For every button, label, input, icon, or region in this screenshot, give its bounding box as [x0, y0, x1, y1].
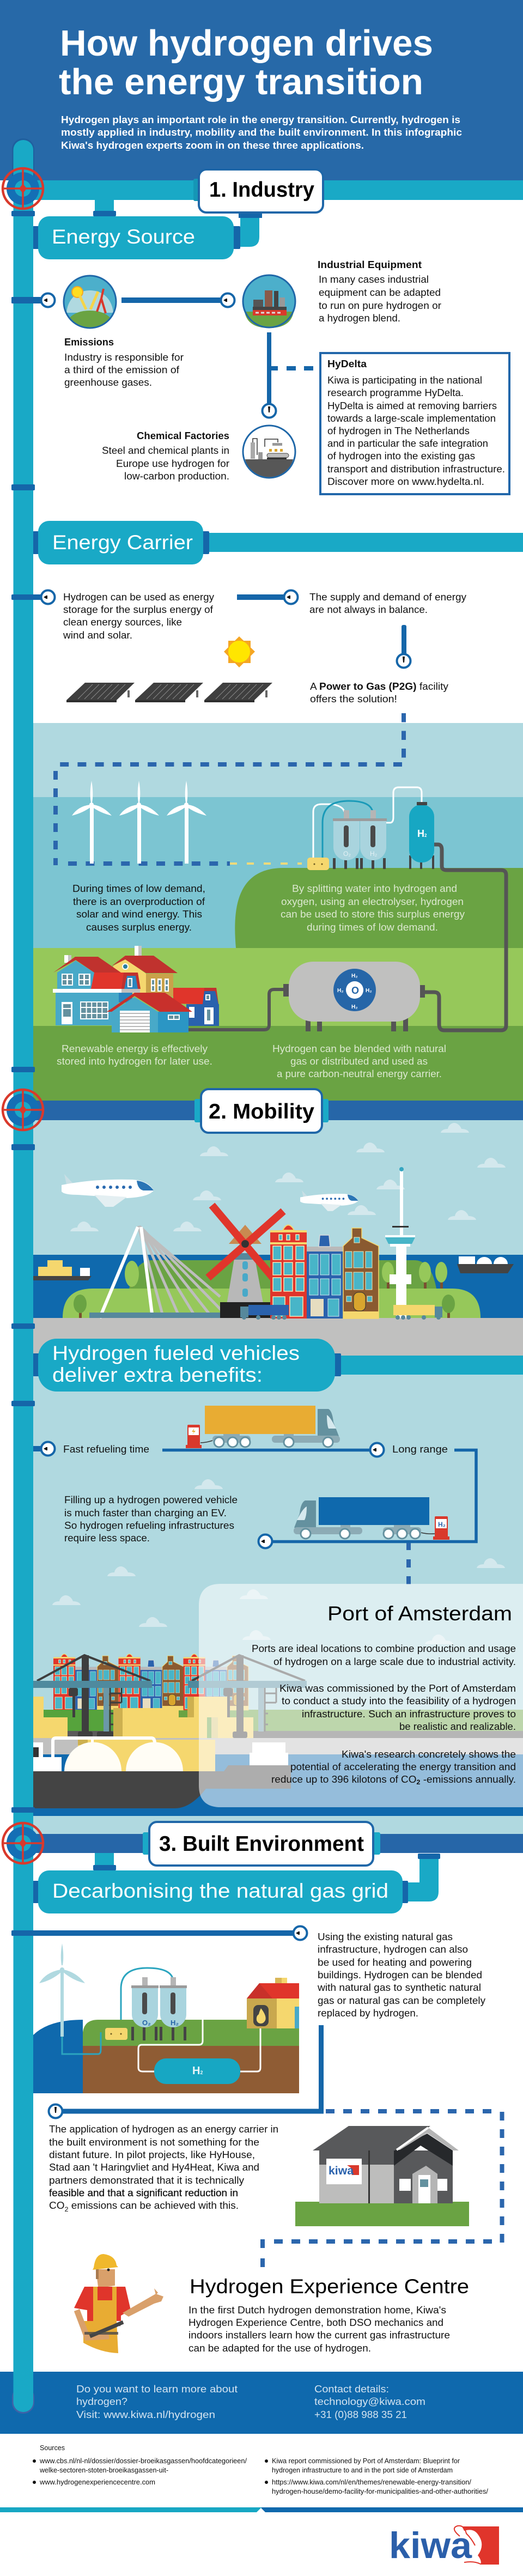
text: contact details: +31 (0)88 988 35 21: [314, 2409, 407, 2420]
callout: HyDelta: transport and distribution infrastructure.: [327, 464, 505, 475]
text: industrial equipment: [318, 259, 441, 324]
text: industrial equipment: Industrial Equipment: [318, 259, 422, 270]
connectors: energy carrier: [13, 594, 406, 655]
box: 3. Built Environment: 3. Built Environment: [159, 1832, 364, 1856]
text: existing gas infrastructure: Using the existing natural gas: [318, 1931, 453, 1942]
text: power to gas: offers the solution!: [310, 694, 397, 704]
callout: HyDelta: HyDelta is aimed at removing barriers: [327, 400, 497, 411]
text: learn more: Do you want to learn more about: [76, 2384, 238, 2395]
text: existing gas infrastructure: infrastructure, hydrogen can also: [318, 1944, 468, 1955]
text: chemical factories: low-carbon production.: [124, 471, 229, 482]
text: splitting water: By splitting water into hydrogen and: [292, 883, 457, 894]
sources: www.cbs.nl/nl-nl/dossier/dossier-broeikasgassen/hoofdcategorieen/: [39, 2457, 247, 2465]
text: filling up: Filling up a hydrogen powered vehicle: [64, 1494, 238, 1505]
text: filling up: So hydrogen refueling infrastructures: [64, 1520, 234, 1531]
sources: Sources: [40, 2444, 65, 2452]
ships in harbour: [33, 1256, 514, 1280]
callout: HyDelta: Kiwa is participating in the national: [327, 375, 482, 386]
icon: hydrogen house: [295, 2126, 469, 2226]
illustration: built environment system: O₂: [142, 2019, 151, 2027]
text: energy storage: wind and solar.: [63, 630, 132, 641]
hydrogen pump: H₂: [438, 1521, 446, 1528]
planes: [62, 1174, 358, 1211]
heading: decarbonising: Decarbonising the natural gas grid: [52, 1880, 388, 1902]
text: experience centre: In the first Dutch hydrogen demonstration home, Kiwa's: [188, 2305, 446, 2316]
heading: decarbonising: [33, 1870, 408, 1913]
heading: hydrogen fueled vehicles: [33, 1339, 523, 1392]
callout: HyDelta: and in particular the safe integration: [327, 438, 488, 449]
text: experience centre: [188, 2305, 450, 2354]
text: low demand: [72, 883, 205, 933]
callout: HyDelta: towards a large-scale implementation: [327, 413, 496, 424]
icon: hydrogen tank: H2: [417, 828, 427, 839]
markers: [41, 293, 276, 417]
text: port description: reduce up to 396 kilotons of CO: [271, 1774, 409, 1785]
text: port description: infrastructure. Such an infrastructure proves to: [302, 1709, 516, 1720]
connector stub: [33, 1446, 42, 1451]
icon: hydrogen house: kiwa: [329, 2165, 354, 2177]
text: existing gas infrastructure: with natural gas to synthetic natural: [317, 1982, 481, 1993]
text: existing gas infrastructure: buildings. Hydrogen can be blended: [318, 1970, 482, 1980]
text: pilot projects: emissions can be achieved with this.: [69, 2200, 239, 2211]
callout: HyDelta: HyDelta: [327, 359, 367, 369]
text: renewable stored: stored into hydrogen for later use.: [57, 1056, 212, 1067]
text: port description: Kiwa was commissioned by the Port of Amsterdam: [279, 1683, 516, 1694]
sources: www.hydrogenexperiencecentre.com: [39, 2478, 155, 2486]
box: 3. Built Environment: [143, 1822, 380, 1866]
text: port description: Ports are ideal locations to combine production and usage: [252, 1643, 516, 1654]
main vertical pipe: [12, 138, 34, 2414]
text: existing gas infrastructure: replaced by hydrogen.: [318, 2008, 418, 2019]
text: port description: 2: [416, 1778, 421, 1786]
charging pump: [186, 1425, 212, 1448]
text: renewable stored: [57, 1043, 212, 1067]
text: filling up: [64, 1494, 238, 1544]
text: port description: of hydrogen on a large scale due to industrial activity.: [273, 1656, 516, 1667]
text: pilot projects: partners demonstrated that it is technically: [49, 2175, 244, 2186]
text: low demand: solar and wind energy. This: [76, 909, 202, 920]
dashed arrow: to experience centre: [263, 2111, 502, 2267]
callout: HyDelta: Discover more on www.hydelta.nl.: [327, 476, 484, 487]
valves: [3, 168, 43, 1863]
title: How hydrogen drives: [60, 23, 433, 64]
marker: [49, 2104, 62, 2118]
heading: 1. Industry: [193, 169, 324, 212]
text: blended: gas or distributed and used as: [290, 1056, 428, 1067]
text: emissions: [64, 337, 184, 388]
text: filling up: require less space.: [64, 1533, 150, 1544]
heading: Port of Amsterdam: Port of Amsterdam: [327, 1602, 512, 1625]
trucks in city: [240, 1305, 442, 1320]
text: chemical factories: [102, 430, 229, 482]
title: [59, 23, 433, 102]
connector line: [11, 1930, 294, 1936]
icon: sun: [224, 636, 255, 667]
icon: storage tank: H₂: [351, 1004, 358, 1010]
text: supply and demand: [309, 592, 466, 615]
text: low demand: During times of low demand,: [72, 883, 205, 894]
section background: mobility: [33, 1120, 523, 1834]
text: energy storage: clean energy sources, like: [63, 617, 182, 628]
footer band: [0, 2372, 523, 2434]
pipe line to pilot text: [63, 2025, 321, 2111]
icon: electrolyser: [307, 787, 422, 870]
text: blended: [272, 1043, 446, 1079]
benefits connector line: [162, 1450, 476, 1542]
port scene: [33, 1654, 523, 1808]
text: industrial equipment: to run on pure hydrogen or: [319, 300, 441, 311]
blue truck: [294, 1497, 429, 1539]
text: emissions: Emissions: [64, 337, 114, 348]
text: existing gas infrastructure: gas or natural gas can be completely: [318, 1995, 485, 2006]
hydrogen pump: [421, 1516, 449, 1540]
title: the energy transition: [59, 62, 423, 102]
icon: worker: [74, 2254, 163, 2353]
heading: hydrogen experience centre: Hydrogen Experience Centre: [190, 2275, 469, 2298]
text: port description: to conduct a study into the feasibility of a hydrogen: [282, 1696, 516, 1706]
heading: energy source: [33, 216, 240, 259]
text: learn more: [76, 2384, 238, 2420]
text: power to gas: A Power to Gas (P2G) facility: [310, 681, 448, 692]
text: chemical factories: Europe use hydrogen for: [116, 458, 229, 469]
text: port description: [252, 1643, 516, 1786]
pipe: house to storage: [188, 989, 283, 1030]
icon: emissions circle: [64, 276, 116, 328]
yellow truck: [205, 1406, 340, 1447]
text: low demand: causes surplus energy.: [86, 922, 192, 933]
text: port description: potential of accelerating the energy transition and: [290, 1761, 516, 1772]
text: pilot projects: the built environment is not something for the: [49, 2137, 259, 2148]
illustration: built environment system: H2: [192, 2065, 203, 2077]
mobility landscape: [63, 1260, 481, 1318]
built environment pipe: [33, 1834, 523, 1853]
callout: HyDelta: of hydrogen into the existing gas: [327, 451, 475, 461]
energy source connector pipes: [93, 200, 262, 247]
text: power to gas: [310, 681, 448, 704]
text: blended: a pure carbon-neutral energy carrier.: [277, 1068, 442, 1079]
text: energy storage: Hydrogen can be used as energy: [63, 592, 214, 603]
heading: energy carrier: [33, 521, 523, 564]
pipe flanges: [11, 211, 42, 1936]
text: industrial equipment: In many cases industrial: [319, 274, 429, 285]
sources: [33, 2444, 488, 2495]
intro text: mostly applied in industry, mobility and the built environment. In this infographic: [61, 127, 462, 138]
text: contact details: technology@kiwa.com: [314, 2396, 425, 2407]
text: pilot projects: distant future. In pilot projects, like HyHouse,: [49, 2149, 255, 2160]
text: chemical factories: Steel and chemical plants in: [102, 445, 229, 456]
marker: [293, 1927, 307, 1940]
text: splitting water: oxygen, using an electrolyser, hydrogen: [281, 896, 464, 907]
text: filling up: is much faster than charging an EV.: [64, 1508, 227, 1518]
icon: houses: [53, 946, 219, 1032]
text: energy storage: storage for the surplus energy of: [63, 604, 214, 615]
box: 2. Mobility: [194, 1089, 329, 1133]
text: existing gas infrastructure: [317, 1931, 485, 2019]
sources: hydrogen infrastructure to and in the port side of Amsterdam: [272, 2466, 453, 2474]
text: blended: Hydrogen can be blended with natural: [272, 1043, 446, 1054]
header band: [0, 0, 523, 180]
sources: Kiwa report commissioned by Port of Amsterdam: Blueprint for: [272, 2457, 460, 2465]
text: fast refueling time: Fast refueling time: [63, 1444, 149, 1455]
text: emissions: greenhouse gases.: [64, 377, 152, 388]
text: experience centre: can be adapted for the use of hydrogen.: [188, 2343, 371, 2354]
text: pilot projects: Stad aan 't Haringvliet and Hy4Heat, Kiwa and: [49, 2162, 259, 2173]
mobility pipe: [33, 1101, 523, 1120]
heading: hydrogen fueled vehicles: Hydrogen fueled vehicles: [52, 1342, 300, 1364]
icon: hydrogen tank: [409, 802, 434, 869]
heading: 1. Industry: 1. Industry: [209, 178, 314, 202]
icon: chemical factories circle: [243, 426, 295, 478]
text: pilot projects: CO: [49, 2200, 64, 2211]
text: splitting water: can be used to store this surplus energy: [281, 909, 465, 920]
callout: HyDelta: research programme HyDelta.: [327, 387, 464, 398]
panel: Port of Amsterdam overlay: [199, 1584, 523, 1807]
port clouds: [52, 1479, 505, 1644]
callout: HyDelta: of hydrogen in The Netherlands: [327, 426, 470, 436]
text: existing gas infrastructure: be used for heating and powering: [318, 1957, 472, 1968]
text: port description: Kiwa's research concretely shows the: [342, 1749, 516, 1760]
text: contact details: [314, 2384, 425, 2420]
built environment connector pipes: [93, 1853, 440, 1901]
mobility clouds: [70, 1123, 506, 1231]
callout: HyDelta: [320, 353, 509, 494]
sources: welke-sectoren-stoten-broeikasgassen-uit-: [39, 2466, 168, 2474]
text: emissions: Industry is responsible for: [64, 352, 184, 363]
icon: storage tank: H₂: [366, 988, 372, 994]
icon: storage tank: H₂: [337, 988, 344, 994]
icon: wind turbines: [72, 781, 206, 864]
icon: industrial equipment circle: [243, 275, 295, 328]
bottom colour bar: [0, 2507, 523, 2512]
text: pilot projects: 2: [64, 2206, 69, 2213]
illustration: built environment system: H₂: [171, 2019, 179, 2027]
text: industrial equipment: a hydrogen blend.: [319, 313, 400, 324]
icon: storage tank: H₂: [351, 973, 358, 979]
text: emissions: a third of the emission of: [64, 364, 180, 375]
sources: https://www.kiwa.com/nl/en/themes/renewable-energy-transition/: [272, 2478, 471, 2486]
section background: energy carrier landscape: [33, 723, 523, 1101]
text: learn more: Visit: www.kiwa.nl/hydrogen: [76, 2409, 215, 2420]
windmill: [208, 1205, 283, 1318]
icon: electrolyser: H₂: [370, 850, 378, 858]
icon: storage tank: [283, 962, 425, 1031]
pipe: gas network: [425, 845, 506, 1030]
text: energy storage: [63, 592, 214, 641]
text: pilot projects: The application of hydrogen as an energy carrier in: [49, 2124, 278, 2135]
text: supply and demand: are not always in balance.: [309, 604, 428, 615]
icon: storage tank: O: [351, 985, 359, 996]
heading: energy source: Energy Source: [52, 226, 195, 248]
text: long range: Long range: [392, 1444, 448, 1455]
text: contact details: Contact details:: [314, 2384, 389, 2395]
text: splitting water: [281, 883, 465, 933]
text: renewable stored: Renewable energy is effectively: [62, 1043, 208, 1054]
teal industry pipe: [33, 180, 523, 200]
kiwa logo: kiwa: [389, 2525, 472, 2566]
dashed arrow: power to gas route: [56, 713, 404, 865]
text: port description: -emissions annually.: [420, 1774, 516, 1785]
trees: [74, 1261, 455, 1318]
intro text: [61, 114, 462, 151]
text: pilot projects: [49, 2124, 278, 2213]
text: splitting water: during times of low demand.: [307, 922, 438, 933]
text: low demand: there is an overproduction of: [73, 896, 205, 907]
Erasmus bridge: [89, 1226, 229, 1318]
intro text: Kiwa's hydrogen experts zoom in on these three applications.: [61, 140, 364, 151]
text: learn more: hydrogen?: [76, 2396, 127, 2407]
text: experience centre: Hydrogen Experience Centre, both DSO mechanics and: [188, 2317, 443, 2328]
dashed arrow to port: [406, 1543, 411, 1584]
markers: [41, 591, 411, 668]
sources: hydrogen-house/demo-facility-for-municipalities-and-other-authorities/: [272, 2487, 488, 2495]
text: chemical factories: Chemical Factories: [137, 430, 229, 441]
illustration: built environment system: [33, 1943, 299, 2093]
markers: [41, 1442, 384, 1548]
text: pilot projects: feasible and that a significant reduction in: [49, 2188, 238, 2198]
box: 2. Mobility: 2. Mobility: [209, 1100, 314, 1123]
Euromast tower: [385, 1167, 415, 1318]
text: experience centre: indoors installers learn how the current gas infrastructure: [188, 2330, 450, 2341]
intro text: Hydrogen plays an important role in the energy transition. Currently, hydrogen is: [61, 114, 460, 125]
heading: hydrogen fueled vehicles: deliver extra benefits:: [52, 1364, 263, 1386]
text: port description: be realistic and realizable.: [399, 1721, 516, 1732]
Amsterdam buildings: [270, 1225, 379, 1319]
connectors: energy source: [11, 297, 313, 405]
icon: electrolyser: O₂: [343, 850, 351, 858]
heading: energy carrier: Energy Carrier: [52, 531, 193, 554]
text: supply and demand: The supply and demand of energy: [309, 592, 466, 603]
text: industrial equipment: equipment can be adapted: [319, 287, 441, 298]
icon: solar panels: [66, 683, 272, 702]
